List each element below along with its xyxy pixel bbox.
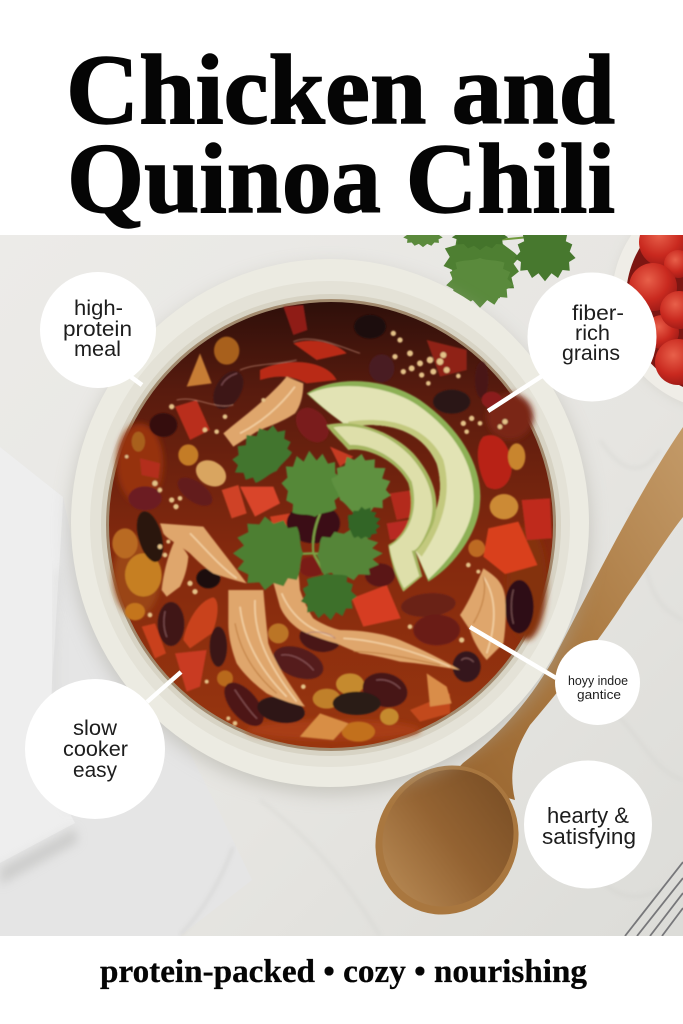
- header background: [0, 0, 683, 235]
- golden beans: [112, 337, 525, 742]
- marble surface: [0, 235, 683, 936]
- fork: [625, 862, 683, 936]
- tomato bowl: [627, 235, 683, 403]
- footer band: [0, 936, 683, 1024]
- title: Quinoa Chili: [67, 123, 615, 234]
- quinoa grains: [125, 331, 508, 726]
- callout: fiber-rich grains: fiber-: [572, 302, 624, 325]
- avocado slices: [307, 381, 480, 592]
- callout: fiber-rich grains: [528, 272, 656, 402]
- callout: high-protein meal: high-: [74, 297, 123, 320]
- callout: garbled label: [555, 640, 640, 725]
- bean highlights: [164, 373, 513, 718]
- slow cooker bowl: [70, 259, 590, 794]
- cloth towel: [0, 461, 232, 926]
- tagline: protein-packed • cozy • nourishing: [100, 954, 587, 990]
- bowl rim: [71, 259, 589, 787]
- callout: garbled label: hoyy indoe: [568, 673, 628, 688]
- callout: slow cooker easy: slow: [73, 717, 118, 740]
- callout: high-protein meal: [40, 272, 156, 388]
- wooden spoon: [348, 427, 683, 941]
- callout: slow cooker easy: easy: [73, 759, 117, 782]
- sauce variations: [113, 393, 547, 740]
- title: Chicken and: [66, 34, 615, 145]
- callout: hearty and satisfying: [524, 760, 652, 888]
- chicken shreds: [190, 387, 494, 702]
- callout: fiber-rich grains: grains: [562, 342, 620, 365]
- dark kidney beans: [128, 315, 534, 733]
- tomato chunks: [140, 305, 552, 722]
- sauce glossy streaks: [177, 339, 360, 406]
- title: [66, 34, 615, 234]
- food photo panel: [0, 186, 683, 941]
- chili soup: [109, 302, 553, 748]
- callout: high-protein meal: meal: [74, 338, 121, 361]
- cilantro sprig: [221, 414, 403, 623]
- callout: high-protein meal: protein: [63, 318, 132, 341]
- callout: garbled label: gantice: [577, 687, 621, 702]
- shredded chicken: [160, 353, 506, 740]
- callout: fiber-rich grains: rich: [575, 322, 610, 345]
- callout: hearty and satisfying: hearty &: [547, 803, 629, 828]
- cilantro garnish on counter: [403, 235, 576, 308]
- callout: hearty and satisfying: satisfying: [542, 824, 636, 849]
- callout: slow cooker easy: [25, 679, 165, 819]
- pointer lines: [131, 376, 556, 702]
- callout: slow cooker easy: cooker: [63, 738, 128, 761]
